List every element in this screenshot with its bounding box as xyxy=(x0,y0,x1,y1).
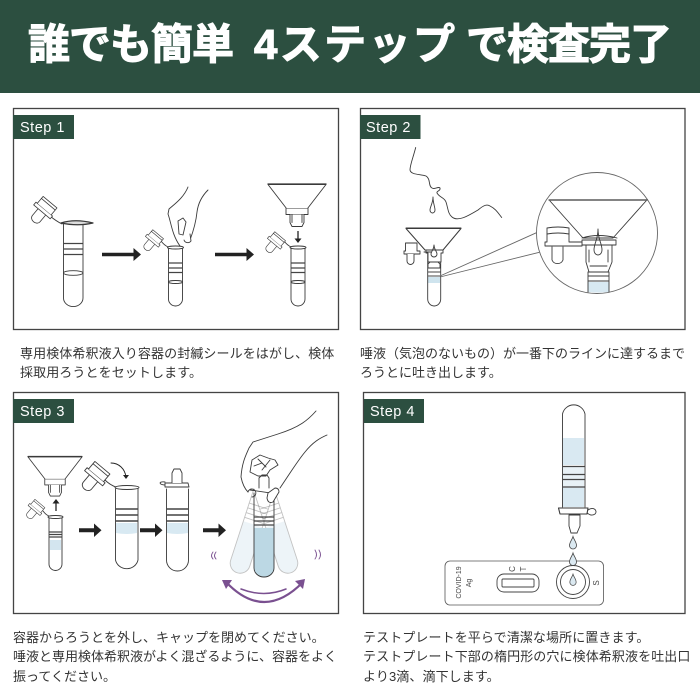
icon: drops xyxy=(570,536,576,549)
title banner xyxy=(0,0,700,93)
panel: step 4 xyxy=(364,392,685,614)
text: step 2 description: ろうとに吐き出します。 xyxy=(360,365,502,380)
illustration: test plate: C xyxy=(508,566,517,572)
arrow xyxy=(79,524,102,537)
label: step 3: Step 3 xyxy=(20,404,65,420)
ghost tube left xyxy=(228,489,273,576)
illustration: test plate: Ag xyxy=(466,579,473,587)
hand xyxy=(241,411,316,492)
label: step 1 xyxy=(13,115,74,139)
illustration: capped tube xyxy=(160,469,189,571)
panel: step 2 xyxy=(360,108,685,330)
label: step 1: Step 1 xyxy=(20,120,65,136)
illustration: shaking tube with hand xyxy=(228,411,327,577)
illustration: funnel set on tube xyxy=(261,184,326,306)
title banner: で検査完了 xyxy=(466,21,672,68)
text: step 4 description: テストプレート下部の楕円形の穴に検体希釈液を吐出口 xyxy=(363,649,691,664)
text: step 1 description: 採取用ろうとをセットします。 xyxy=(20,365,202,380)
icon: purple swing arrows xyxy=(222,579,305,602)
text: step 3 description: 振ってください。 xyxy=(13,669,116,684)
title banner: 誰でも簡単 xyxy=(28,21,234,68)
illustration: face spitting xyxy=(410,148,502,219)
illustration: removing funnel xyxy=(22,457,82,570)
arrow xyxy=(140,524,162,537)
title banner: 4ステップ xyxy=(254,21,455,68)
arrow xyxy=(215,248,254,261)
illustration: funnel in tube with zoom lines xyxy=(404,228,539,306)
icon: saliva drop xyxy=(430,197,435,213)
text: step 4 description: テストプレートを平らで清潔な場所に置きます。 xyxy=(363,630,650,645)
illustration: magnified funnel detail xyxy=(536,172,658,294)
illustration: hand peeling seal xyxy=(139,187,208,306)
label: step 4 xyxy=(364,399,424,423)
illustration: test plate: COVID-19 xyxy=(456,566,463,599)
icon: motion lines xyxy=(212,550,320,559)
text: step 2 description: 唾液（気泡のないもの）が一番下のラインに達するまで xyxy=(360,346,685,361)
text: step 1 description: 専用検体希釈液入り容器の封緘シールをはがし、検体 xyxy=(20,346,334,361)
panel: step 1 xyxy=(13,108,338,330)
illustration: test plate xyxy=(445,553,604,605)
illustration: open tube with seal xyxy=(25,195,93,307)
text: step 4 description: より3滴、滴下します。 xyxy=(363,669,500,684)
text: step 3 description: 容器からろうとを外し、キャップを閉めてください。 xyxy=(13,630,325,645)
arrow xyxy=(203,524,226,537)
centre tube xyxy=(254,528,274,577)
label: step 4: Step 4 xyxy=(370,404,415,420)
illustration: test plate: S xyxy=(592,580,601,586)
text: step 3 description: 唾液と専用検体希釈液がよく混ざるように、容器をよく xyxy=(13,649,337,664)
illustration: closing cap xyxy=(75,460,139,569)
illustration: test plate: T xyxy=(519,566,528,571)
label: step 3 xyxy=(13,399,74,423)
label: step 2: Step 2 xyxy=(366,120,411,136)
illustration: inverted tube dripping xyxy=(558,405,596,533)
arrow xyxy=(102,248,141,261)
label: step 2 xyxy=(360,115,420,139)
ghost tube right xyxy=(255,489,300,576)
panel: step 3 xyxy=(13,392,338,614)
